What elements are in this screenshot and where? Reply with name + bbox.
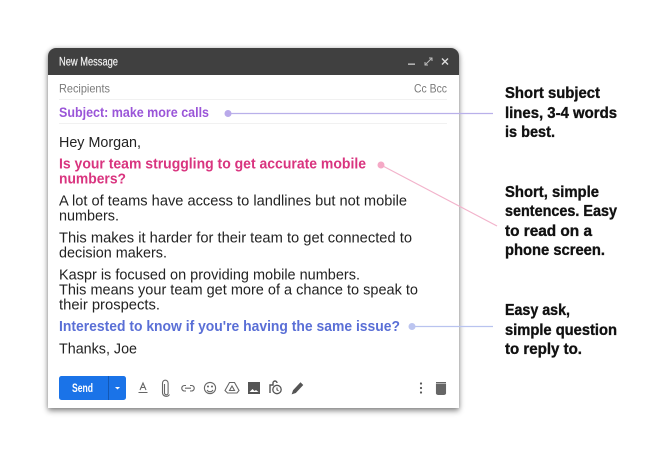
email window header	[48, 48, 459, 75]
paragraph: Kaspr: Kaspr is focused on providing mobile numbers.	[59, 266, 360, 284]
icon: trash	[436, 382, 446, 395]
icon: text format	[138, 383, 148, 392]
connector: easy ask	[408, 323, 493, 330]
callout: simple sentences: Short, simple	[505, 184, 599, 201]
pink headline question	[59, 156, 366, 188]
paragraph: decision makers: decision makers.	[59, 244, 167, 262]
recipients row: Recipients	[59, 82, 110, 96]
callout: subject lines: lines, 3-4 words	[505, 105, 617, 122]
send button: Send	[72, 383, 93, 395]
icon: minimise	[408, 64, 415, 65]
paragraph: landlines	[59, 192, 407, 224]
icon: more menu	[420, 382, 422, 394]
callout: subject lines: Short subject	[505, 85, 600, 102]
icon: drive	[225, 382, 239, 393]
paragraph: Kaspr: their prospects.	[59, 296, 160, 314]
callout: subject lines	[505, 85, 617, 141]
callout: subject lines: is best.	[505, 124, 555, 141]
connector: subject	[224, 110, 493, 117]
paragraph: landlines: A lot of teams have access to landlines but not mobile	[59, 192, 407, 210]
icon: close	[442, 58, 448, 64]
callout: simple sentences: sentences. Easy	[505, 203, 617, 220]
recipients row: Cc Bcc	[414, 82, 447, 96]
icon: confidential clock	[270, 381, 281, 394]
paragraph: decision makers: This makes it harder for their team to get connected to	[59, 230, 412, 246]
email card background	[48, 48, 459, 408]
callout: simple sentences: to read on a	[505, 223, 592, 240]
icon: image	[248, 382, 260, 394]
callout: easy ask: Easy ask,	[505, 302, 570, 319]
icon: attachment	[162, 380, 170, 396]
callout: simple sentences	[505, 184, 617, 259]
icon: emoji	[204, 382, 216, 394]
icon: signature pen	[292, 383, 302, 394]
icon: link	[182, 386, 194, 391]
paragraph: decision makers	[59, 230, 412, 262]
callout: simple sentences: phone screen.	[505, 242, 605, 259]
callout: easy ask: to reply to.	[505, 341, 582, 358]
subject line: Subject: make more calls	[59, 105, 209, 120]
pink headline question: Is your team struggling to get accurate mobile	[59, 156, 366, 172]
callout: easy ask: simple question	[505, 322, 617, 339]
sign-off: Thanks, Joe	[59, 340, 137, 358]
email greeting: Hey Morgan,	[59, 134, 141, 151]
icon: expand	[425, 58, 432, 65]
paragraph: Kaspr: This means your team get more of a chance to speak to	[59, 282, 418, 298]
callout: easy ask	[505, 302, 617, 358]
paragraph: Kaspr	[59, 266, 418, 314]
blue question: Interested to know if you're having the same issue?	[59, 318, 400, 335]
paragraph: landlines: numbers.	[59, 208, 119, 224]
window title: New Message	[59, 56, 118, 68]
pink headline question: numbers?	[59, 170, 126, 188]
send button	[59, 376, 126, 400]
connector: sentences	[378, 162, 497, 226]
recipients row	[59, 82, 447, 96]
compose toolbar icons	[138, 380, 446, 396]
